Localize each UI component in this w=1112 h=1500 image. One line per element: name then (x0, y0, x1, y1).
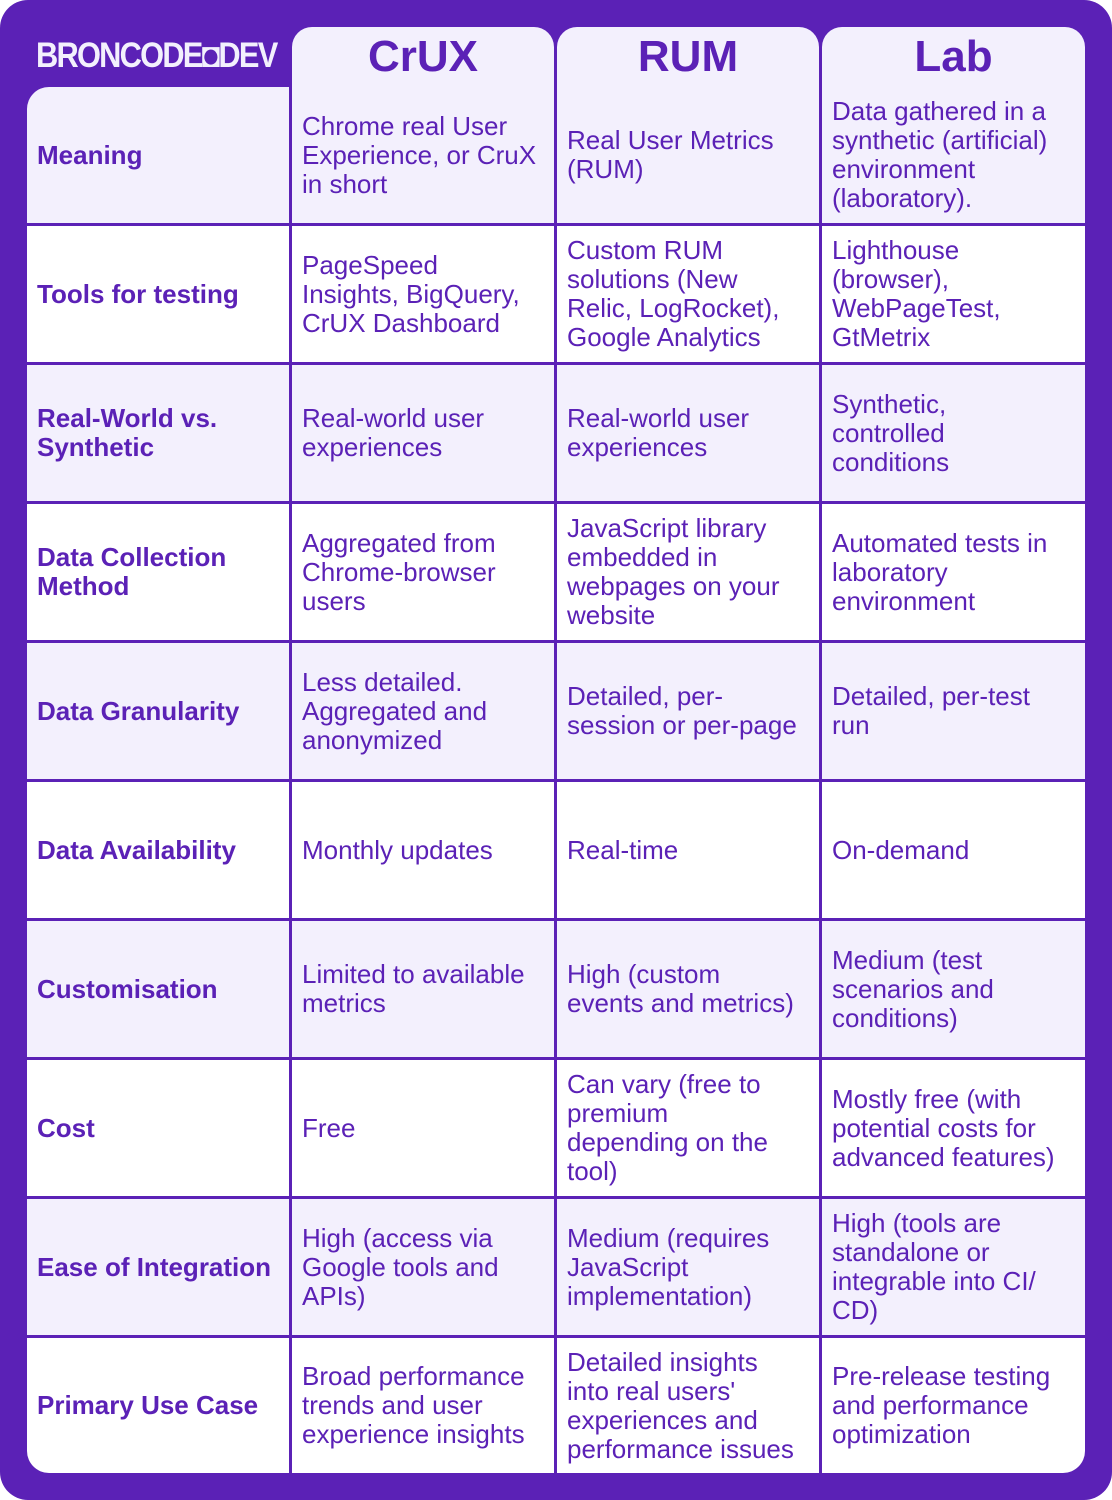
comparison table: into real users' (567, 1376, 735, 1406)
comparison table: Relic, LogRocket), (567, 293, 779, 323)
row: Cost: Cost (37, 1112, 95, 1142)
comparison table: laboratory (832, 556, 948, 586)
row: Real-World: Synthetic (37, 432, 154, 462)
comparison table: JavaScript (567, 1252, 688, 1282)
comparison table: High (custom (567, 959, 720, 989)
comparison table: advanced features) (832, 1142, 1055, 1172)
comparison table: website (567, 600, 655, 630)
row: Tools (27, 226, 289, 362)
comparison table: experience insights (302, 1419, 525, 1449)
comparison table: High (access via (302, 1222, 493, 1252)
header: Lab: Lab (914, 32, 993, 81)
comparison table: synthetic (artificial) (832, 125, 1047, 155)
comparison table: metrics (302, 988, 386, 1018)
comparison table: anonymized (302, 724, 442, 754)
logo: BRONCODE◘DEV (36, 36, 276, 75)
comparison table: Detailed, per- (567, 681, 723, 711)
comparison table: WebPageTest, (832, 293, 1001, 323)
comparison table: potential costs for (832, 1112, 1036, 1142)
comparison table: conditions) (832, 1002, 958, 1032)
comparison table: conditions (832, 446, 949, 476)
comparison table: experiences (567, 432, 707, 462)
comparison table: Monthly updates (302, 834, 493, 864)
comparison table: standalone or (832, 1237, 990, 1267)
row: Ease (27, 1199, 289, 1335)
comparison table: High (tools are (832, 1208, 1001, 1238)
row: Use case (27, 1338, 289, 1473)
comparison table: Less detailed. (302, 666, 462, 696)
row: Availability (27, 782, 289, 918)
comparison table: scenarios and (832, 974, 994, 1004)
comparison table: APIs) (302, 1280, 366, 1310)
header: CrUX: CrUX (368, 32, 478, 81)
comparison table: CrUX Dashboard (302, 308, 500, 338)
comparison table: JavaScript library (567, 513, 766, 543)
comparison table: experiences and (567, 1404, 758, 1434)
comparison table: embedded in (567, 542, 717, 572)
comparison table: run (832, 710, 870, 740)
comparison table: Can vary (free to (567, 1069, 761, 1099)
comparison table: (browser), (832, 264, 949, 294)
comparison table: Aggregated from (302, 528, 496, 558)
comparison table: Aggregated and (302, 696, 487, 726)
comparison table: Experience, or CruX (302, 140, 536, 170)
comparison table: solutions (New (567, 264, 738, 294)
comparison table: Chrome real User (302, 110, 507, 140)
row: Collection (27, 504, 289, 640)
row: Cost (27, 1060, 289, 1196)
comparison table: Pre-release testing (832, 1361, 1050, 1391)
comparison table: optimization (832, 1419, 971, 1449)
comparison table: On-demand (832, 834, 969, 864)
row: Granularity: Data Granularity (37, 696, 239, 726)
row: Ease: Ease of Integration (37, 1252, 271, 1282)
comparison table: experiences (302, 432, 442, 462)
comparison table: Real User Metrics (567, 125, 774, 155)
comparison table: Insights, BigQuery, (302, 278, 520, 308)
comparison table: tool) (567, 1156, 618, 1186)
row: Customisation (27, 921, 289, 1057)
comparison table: premium (567, 1098, 668, 1128)
comparison table: (laboratory). (832, 183, 972, 213)
header: RUM (557, 27, 819, 87)
header: RUM: RUM (638, 32, 738, 81)
row: Granularity (27, 643, 289, 779)
comparison table: webpages on your (567, 571, 779, 601)
comparison table: Detailed, per-test (832, 681, 1030, 711)
header: Lab (822, 27, 1085, 87)
comparison table: Chrome-browser (302, 556, 496, 586)
comparison table: Real-world user (302, 403, 484, 433)
comparison table: in short (302, 168, 387, 198)
comparison table: events and metrics) (567, 988, 794, 1018)
comparison table: controlled (832, 418, 945, 448)
comparison table: Custom RUM (567, 235, 723, 265)
comparison table: CD) (832, 1295, 878, 1325)
comparison table: Mostly free (with (832, 1084, 1021, 1114)
header: CrUX (292, 27, 554, 87)
comparison table: integrable into CI/ (832, 1266, 1036, 1296)
comparison table: Lighthouse (832, 235, 959, 265)
row: Collection: Method (37, 571, 129, 601)
comparison table: Real-time (567, 834, 678, 864)
comparison table: Automated tests in (832, 528, 1047, 558)
comparison table: Real-world user (567, 403, 749, 433)
comparison table: performance issues (567, 1434, 794, 1464)
row: Real-World (27, 365, 289, 501)
comparison table: session or per-page (567, 710, 797, 740)
comparison table: Data gathered in a (832, 96, 1046, 126)
row: Meaning (27, 87, 289, 223)
row: Use case: Primary Use Case (37, 1390, 258, 1420)
row: Availability: Data Availability (37, 834, 236, 864)
row: Tools: Tools for testing (37, 278, 239, 308)
row: Customisation: Customisation (37, 974, 218, 1004)
comparison table: Google tools and (302, 1252, 499, 1282)
comparison table: Broad performance (302, 1361, 525, 1391)
comparison table: environment (832, 154, 975, 184)
comparison table: Detailed insights (567, 1346, 758, 1376)
comparison table: environment (832, 586, 975, 616)
row: Real-World: Real-World vs. (37, 403, 217, 433)
comparison table: (RUM) (567, 154, 644, 184)
comparison table: and performance (832, 1390, 1029, 1420)
comparison table: depending on the (567, 1127, 768, 1157)
comparison table: users (302, 586, 366, 616)
row: Meaning: Meaning (37, 140, 142, 170)
comparison table: Medium (test (832, 944, 982, 974)
comparison table: GtMetrix (832, 322, 930, 352)
comparison table: Free (302, 1112, 355, 1142)
comparison table: PageSpeed (302, 250, 438, 280)
comparison table: implementation) (567, 1280, 752, 1310)
comparison table: trends and user (302, 1390, 483, 1420)
row: Collection: Data Collection (37, 542, 226, 572)
comparison table: Medium (requires (567, 1222, 769, 1252)
comparison table: Google Analytics (567, 322, 761, 352)
comparison table: Limited to available (302, 959, 525, 989)
comparison table: Synthetic, (832, 388, 946, 418)
